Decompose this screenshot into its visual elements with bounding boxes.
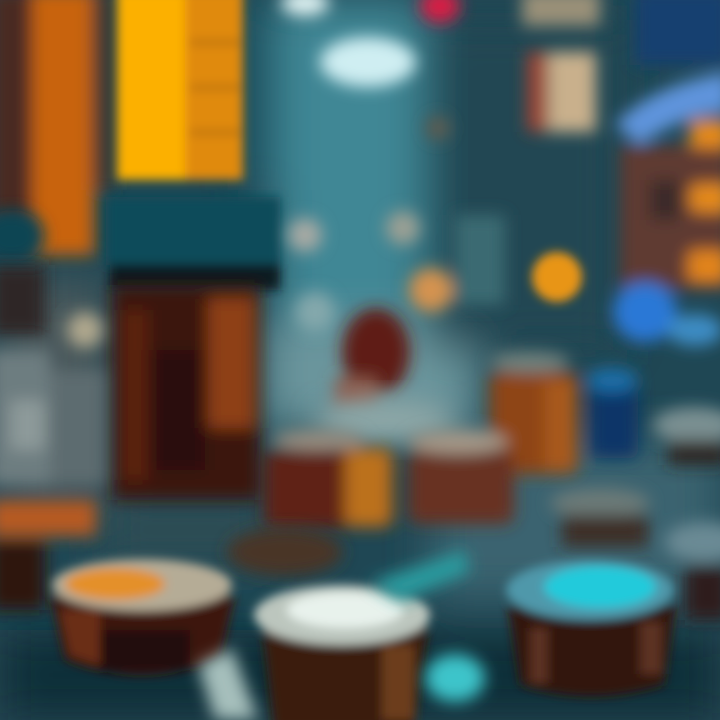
icon: cup with white top: [254, 585, 430, 720]
icon: cup with cyan top: [506, 560, 676, 696]
panel: bokeh lights: [288, 116, 505, 332]
panel: yellow lit sign: [117, 0, 243, 180]
icon: cup with orange top: [50, 559, 235, 675]
icon: middle cups: [315, 398, 455, 442]
icon: right small cups: [227, 407, 720, 620]
icon: rear cups: [264, 351, 638, 528]
panel: top lights and signs: [281, 0, 600, 132]
panel: left orange building: [0, 0, 114, 255]
icon: orange round lamp: [532, 252, 582, 302]
panel: left grey wall: [0, 265, 105, 610]
panel: right side building: [613, 0, 720, 346]
panel: small left awning: [0, 210, 44, 262]
panel: teal awning: [106, 197, 280, 290]
panel: dark brown doorway: [112, 285, 260, 500]
icon: floor reflections: [198, 550, 485, 720]
icon: red-brown figure: [335, 308, 410, 410]
